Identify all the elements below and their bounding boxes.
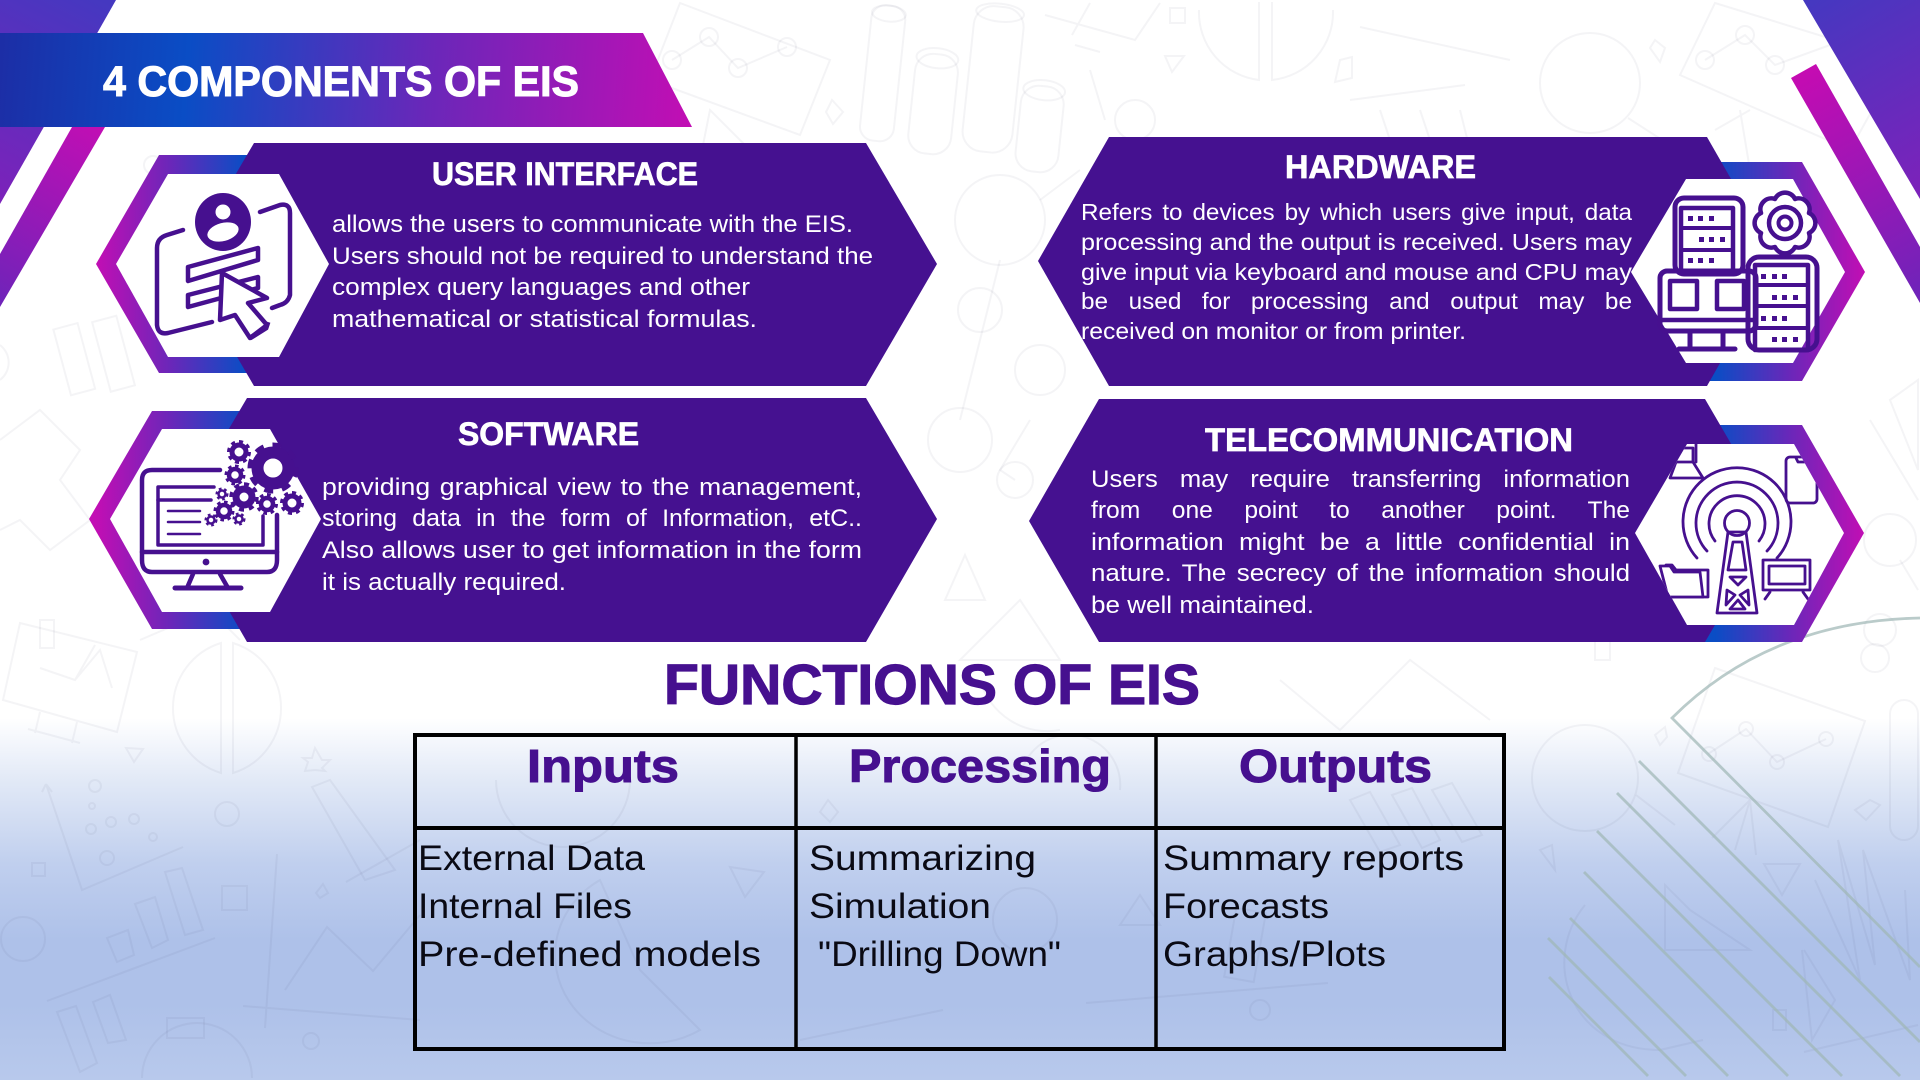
heading: functions of EIS: FUNCTIONS OF EIS (664, 653, 1200, 717)
decorative corner shapes top-right (1791, 0, 1920, 303)
column: processing: Simulation (809, 887, 991, 926)
panel: hardware (1038, 137, 1865, 386)
table header: Processing (849, 740, 1111, 792)
column: inputs: Internal Files (418, 887, 632, 926)
icon: telecommunication tower (1660, 444, 1817, 613)
table: functions of EIS (415, 735, 1504, 1049)
body text: telecommunication: nature. The secrecy of the information should (1091, 560, 1630, 587)
body text: user interface: complex query languages and other (332, 274, 750, 301)
body text: hardware: be used for processing and output may be (1081, 288, 1632, 314)
icon: computer with gears (142, 442, 302, 588)
body text: hardware: processing and the output is received. Users may (1081, 229, 1633, 255)
body text: user interface: Users should not be required to understand the (332, 243, 873, 270)
body text: software: providing graphical view to the management, (322, 474, 862, 501)
title banner (0, 33, 692, 127)
table header: Inputs (527, 740, 679, 792)
column: outputs: Forecasts (1163, 887, 1329, 926)
column: outputs (1163, 839, 1464, 974)
panel: software (89, 398, 937, 642)
body text: user interface (332, 211, 873, 333)
column: outputs: Summary reports (1163, 839, 1464, 878)
icon: user interface cursor (157, 193, 290, 338)
icon: servers and gear (1660, 193, 1817, 350)
body text: telecommunication: information might be a little confidential in (1091, 529, 1630, 556)
heading: hardware: HARDWARE (1285, 149, 1476, 185)
body text: software: it is actually required. (322, 569, 566, 596)
body text: hardware: Refers to devices by which users give input, data (1081, 199, 1632, 225)
body text: hardware: give input via keyboard and mouse and CPU may (1081, 259, 1633, 285)
body text: hardware: received on monitor or from printer. (1081, 318, 1466, 344)
title banner: 4 COMPONENTS OF EIS (103, 58, 579, 106)
heading: software: SOFTWARE (458, 416, 639, 452)
table header: Outputs (1239, 740, 1432, 792)
curved teal outline with diagonal hatch lines (1548, 618, 1920, 1076)
column: inputs (418, 839, 761, 974)
body text: user interface: mathematical or statistical formulas. (332, 306, 757, 333)
heading: user interface: USER INTERFACE (432, 156, 698, 192)
table header (527, 740, 1432, 792)
column: inputs: Pre-defined models (418, 935, 761, 974)
body text: software (322, 474, 862, 596)
body text: telecommunication: Users may require transferring information (1091, 466, 1630, 493)
body text: telecommunication: be well maintained. (1091, 592, 1314, 619)
body text: user interface: allows the users to communicate with the EIS. (332, 211, 853, 238)
heading: telecommunication: TELECOMMUNICATION (1205, 422, 1573, 458)
decorative corner shapes top-left (0, 0, 116, 307)
column: inputs: External Data (418, 839, 646, 878)
body text: software: storing data in the form of Information, etC.. (322, 505, 862, 532)
body text: hardware (1081, 199, 1633, 344)
panel: telecommunication (1029, 399, 1864, 642)
panel: user interface (96, 143, 937, 386)
body text: software: Also allows user to get information in the form (322, 537, 862, 564)
column: processing: "Drilling Down" (818, 935, 1061, 974)
column: processing (809, 839, 1061, 974)
column: processing: Summarizing (809, 839, 1036, 878)
body text: telecommunication (1091, 466, 1630, 619)
body text: telecommunication: from one point to another point. The (1091, 497, 1630, 524)
column: outputs: Graphs/Plots (1163, 935, 1386, 974)
